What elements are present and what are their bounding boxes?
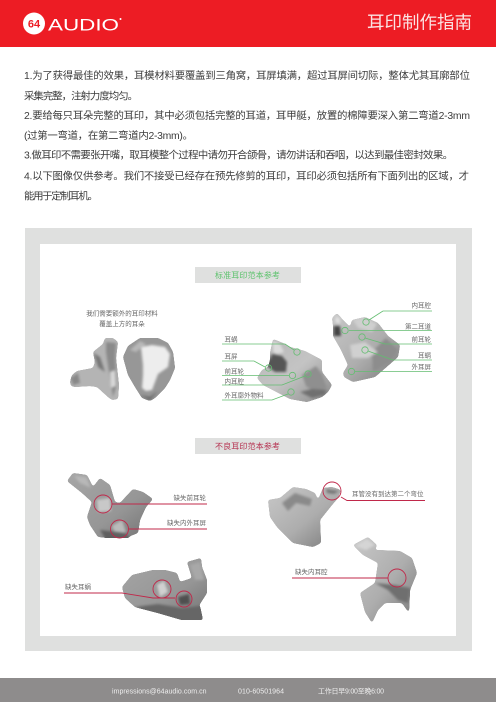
bad ear impression: missing cymba bbox=[353, 537, 417, 623]
logo: 64 Audio bbox=[23, 12, 122, 34]
footer bar bbox=[0, 678, 496, 702]
callout: missing cymba bbox=[292, 567, 406, 587]
footer bar: impressions@64audio.com.cn bbox=[112, 688, 207, 696]
instructions text block: 4.以下图像仅供参考。我们不接受已经存在预先修剪的耳印，耳印必须包括所有下面列出的区域，才 bbox=[24, 170, 469, 182]
logo: 64 Audio: AUDIO bbox=[48, 16, 119, 34]
bad ear impression: missing concha bbox=[122, 558, 207, 620]
bad ear impression: missing helix and tragus bbox=[67, 473, 153, 538]
instructions text block bbox=[24, 69, 470, 202]
labels and leaders: left ear: 内耳腔 bbox=[224, 376, 244, 386]
callout: canal does not reach second bend bbox=[323, 482, 425, 500]
callout: missing concha: 缺失耳蜗 bbox=[65, 582, 92, 591]
instructions text block: 2.要给每只耳朵完整的耳印，其中必须包括完整的耳道，耳甲艇，放置的棉障要深入第二弯道2-3mm bbox=[24, 109, 470, 122]
labels and leaders: left ear: 外耳廓外物料 bbox=[224, 390, 264, 400]
callout: missing helix and tragus bbox=[94, 493, 207, 538]
labels and leaders: left ear: 前耳轮 bbox=[224, 366, 244, 376]
labels and leaders: right ear: 外耳屏 bbox=[412, 362, 432, 371]
labels and leaders: right ear: 耳蜗 bbox=[418, 350, 432, 360]
heading: poor ear impression reference bbox=[195, 438, 301, 454]
heading: standard ear impression reference bbox=[195, 267, 301, 283]
labels and leaders: right ear: 内耳腔 bbox=[412, 300, 432, 310]
title: 耳印制作指南 bbox=[367, 12, 472, 32]
callout: missing cymba: 缺失内耳腔 bbox=[295, 567, 328, 576]
footer bar: 工作日早9:00至晚6:00 bbox=[318, 686, 384, 696]
ear impression: top view bbox=[123, 338, 175, 401]
instructions text block: 采集完整，注射力度均匀。 bbox=[24, 90, 138, 102]
callout: canal does not reach second bend: 耳管没有到达第二个弯位 bbox=[352, 489, 424, 498]
instructions text block: (过第一弯道，在第二弯道内2-3mm)。 bbox=[24, 129, 193, 142]
heading: poor ear impression reference: 不良耳印范本参考 bbox=[215, 441, 280, 451]
header bar bbox=[0, 0, 496, 47]
ear impression: annotated right bbox=[332, 313, 400, 382]
panel: reference frame bbox=[25, 228, 472, 651]
instructions text block: 能用于定制耳机。 bbox=[24, 190, 98, 202]
caption: extra material: 覆盖上方的耳朵 bbox=[99, 319, 145, 328]
caption: extra material bbox=[86, 308, 158, 328]
labels and leaders: left ear: 耳蜗 bbox=[224, 334, 238, 344]
logo: 64 Audio: 64 bbox=[28, 18, 41, 30]
callout: missing concha bbox=[64, 580, 192, 607]
labels and leaders: right ear: 前耳轮 bbox=[412, 334, 432, 344]
bad ear impression: canal too short bbox=[268, 487, 341, 547]
caption: extra material: 我们需要额外的耳印材料 bbox=[86, 308, 158, 318]
labels and leaders: right ear: 第二耳道 bbox=[405, 322, 432, 330]
ear impression: side view bbox=[70, 338, 119, 400]
callout: missing helix and tragus: 缺失内外耳屏 bbox=[167, 518, 206, 527]
ear impression: annotated left bbox=[257, 339, 332, 402]
footer bar: 010-60501964 bbox=[238, 688, 284, 696]
labels and leaders: left ear bbox=[222, 334, 311, 400]
instructions text block: 3.做耳印不需要张开嘴，取耳模整个过程中请勿开合颌骨，请勿讲话和吞咽，以达到最佳密封效果。 bbox=[24, 148, 453, 162]
callout: missing helix and tragus: 缺失前耳轮 bbox=[174, 493, 206, 502]
labels and leaders: right ear bbox=[342, 300, 432, 375]
instructions text block: 1.为了获得最佳的效果，耳模材料要覆盖到三角窝，耳屏填满，超过耳屏间切际，整体尤其耳廓部位 bbox=[24, 69, 470, 82]
heading: standard ear impression reference: 标准耳印范本参考 bbox=[215, 270, 280, 280]
labels and leaders: left ear: 耳屏 bbox=[224, 352, 238, 360]
